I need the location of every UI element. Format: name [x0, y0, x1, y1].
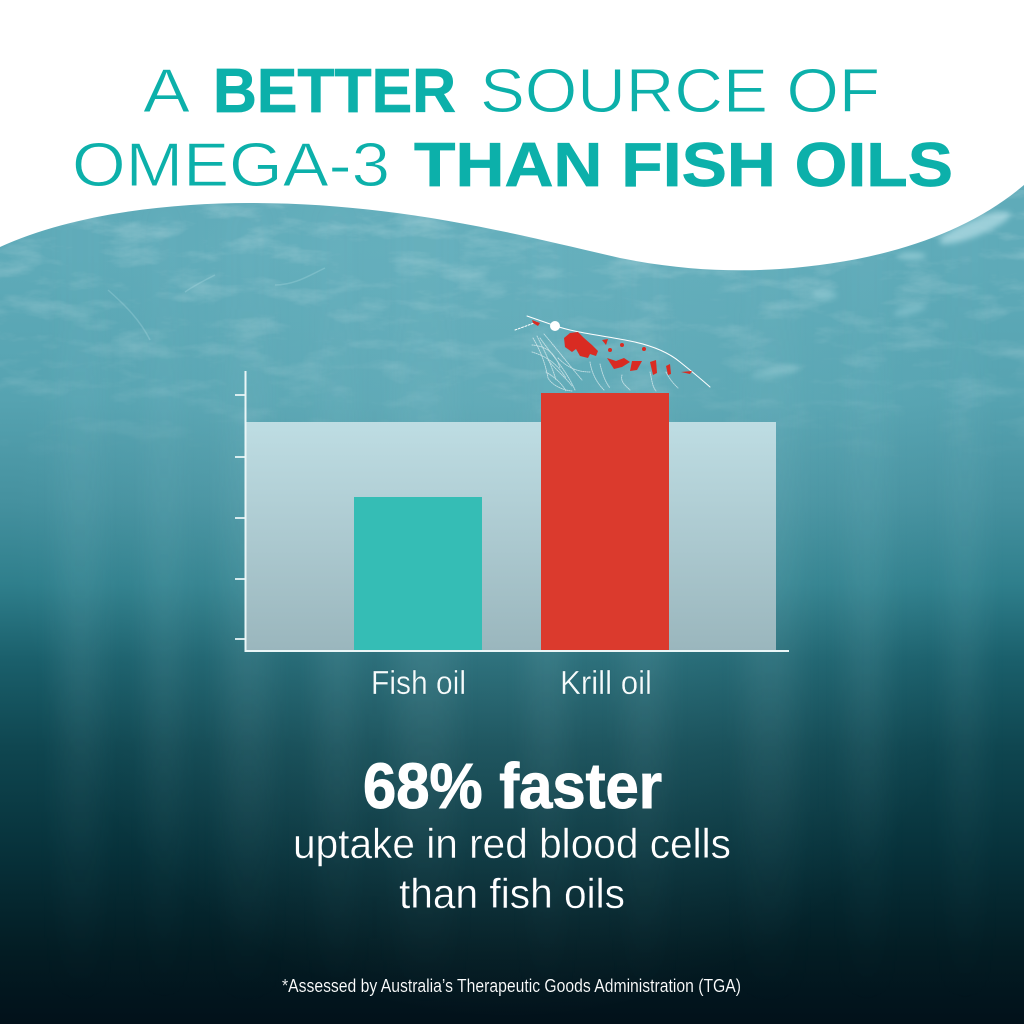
icon: krill	[515, 316, 710, 391]
callout headline: 68% faster	[363, 750, 662, 822]
title line 1	[143, 57, 880, 126]
krill white outline	[515, 316, 710, 391]
water surface highlights	[750, 206, 1013, 381]
chart axes and ticks	[235, 371, 789, 652]
chart reference band	[246, 422, 776, 651]
label: fish oil: Fish oil	[371, 664, 466, 701]
krill eye	[550, 321, 560, 331]
bar: krill oil	[541, 393, 669, 651]
bar chart	[235, 371, 789, 701]
title line 1: BETTER	[213, 57, 456, 126]
title line 2: OMEGA-3	[72, 131, 390, 200]
title line 1: A	[143, 57, 191, 126]
white header wave	[0, 0, 1024, 270]
bar: fish oil	[354, 497, 482, 651]
callout text line 2: than fish oils	[399, 870, 625, 917]
krill red markings	[532, 320, 692, 375]
label: krill oil: Krill oil	[560, 664, 652, 701]
title	[72, 57, 953, 200]
callout: 68% faster	[293, 750, 731, 917]
title line 1: SOURCE OF	[480, 57, 880, 126]
title line 2: THAN FISH OILS	[414, 131, 953, 200]
callout text line 1: uptake in red blood cells	[293, 820, 731, 867]
title line 2	[72, 131, 953, 200]
footnote: *Assessed by Australia’s Therapeutic Goods Administration (TGA)	[282, 976, 741, 996]
